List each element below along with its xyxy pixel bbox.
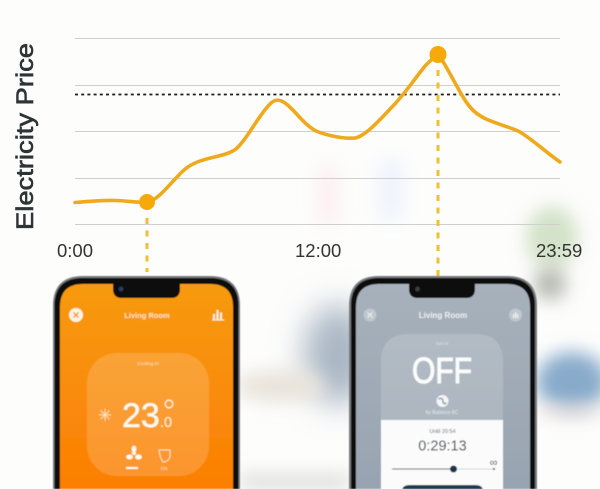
camera [415, 287, 420, 291]
dashed threshold line [75, 94, 560, 96]
phone: cooling on [53, 276, 240, 489]
off value: OFF [412, 350, 472, 391]
white timer panel [381, 420, 503, 489]
room title: Living Room [419, 311, 467, 320]
chart grid lines [75, 38, 560, 224]
card caption: Set to [436, 341, 449, 347]
balance caption: by Balance AC [426, 410, 459, 416]
fan icon [126, 446, 142, 469]
screen: orange [60, 284, 233, 489]
room title: Living Room [124, 311, 170, 320]
slider [392, 466, 495, 472]
marker: peak price point [430, 46, 446, 63]
notch [113, 282, 180, 298]
dashed drop line: peak price [436, 70, 440, 276]
phone: switched off [349, 276, 537, 489]
notch [409, 282, 475, 298]
snow icon: ✳ [98, 406, 112, 425]
screen: grey [356, 284, 530, 489]
camera [119, 287, 123, 291]
close button [364, 308, 376, 322]
x-axis label: end: 23:59 [536, 240, 582, 261]
blurred room background [235, 160, 600, 489]
balance icon [436, 395, 448, 407]
temperature decimal: .0 [160, 415, 172, 431]
status card [381, 334, 503, 489]
electricity price curve [75, 54, 560, 202]
action button [402, 485, 483, 489]
dashed drop line: low price [146, 218, 148, 272]
until label: Until 20:54 [429, 429, 456, 435]
stats button [509, 308, 522, 322]
y-axis title: Electricity Price [12, 43, 39, 230]
card caption: Cooling to [137, 361, 159, 367]
temperature value: 23 [122, 397, 160, 435]
x-axis label: noon: 12:00 [295, 240, 341, 261]
swing label: ON [161, 466, 167, 471]
marker: low price point [139, 194, 155, 210]
countdown: 0:29:13 [418, 438, 467, 454]
degree sign [165, 400, 173, 408]
stats icon [212, 310, 224, 320]
x-axis label: start: 0:00 [57, 240, 93, 261]
close button [69, 308, 83, 322]
swing icon [159, 450, 170, 462]
infinity symbol: ∞ [490, 457, 497, 469]
temperature card [87, 353, 209, 476]
